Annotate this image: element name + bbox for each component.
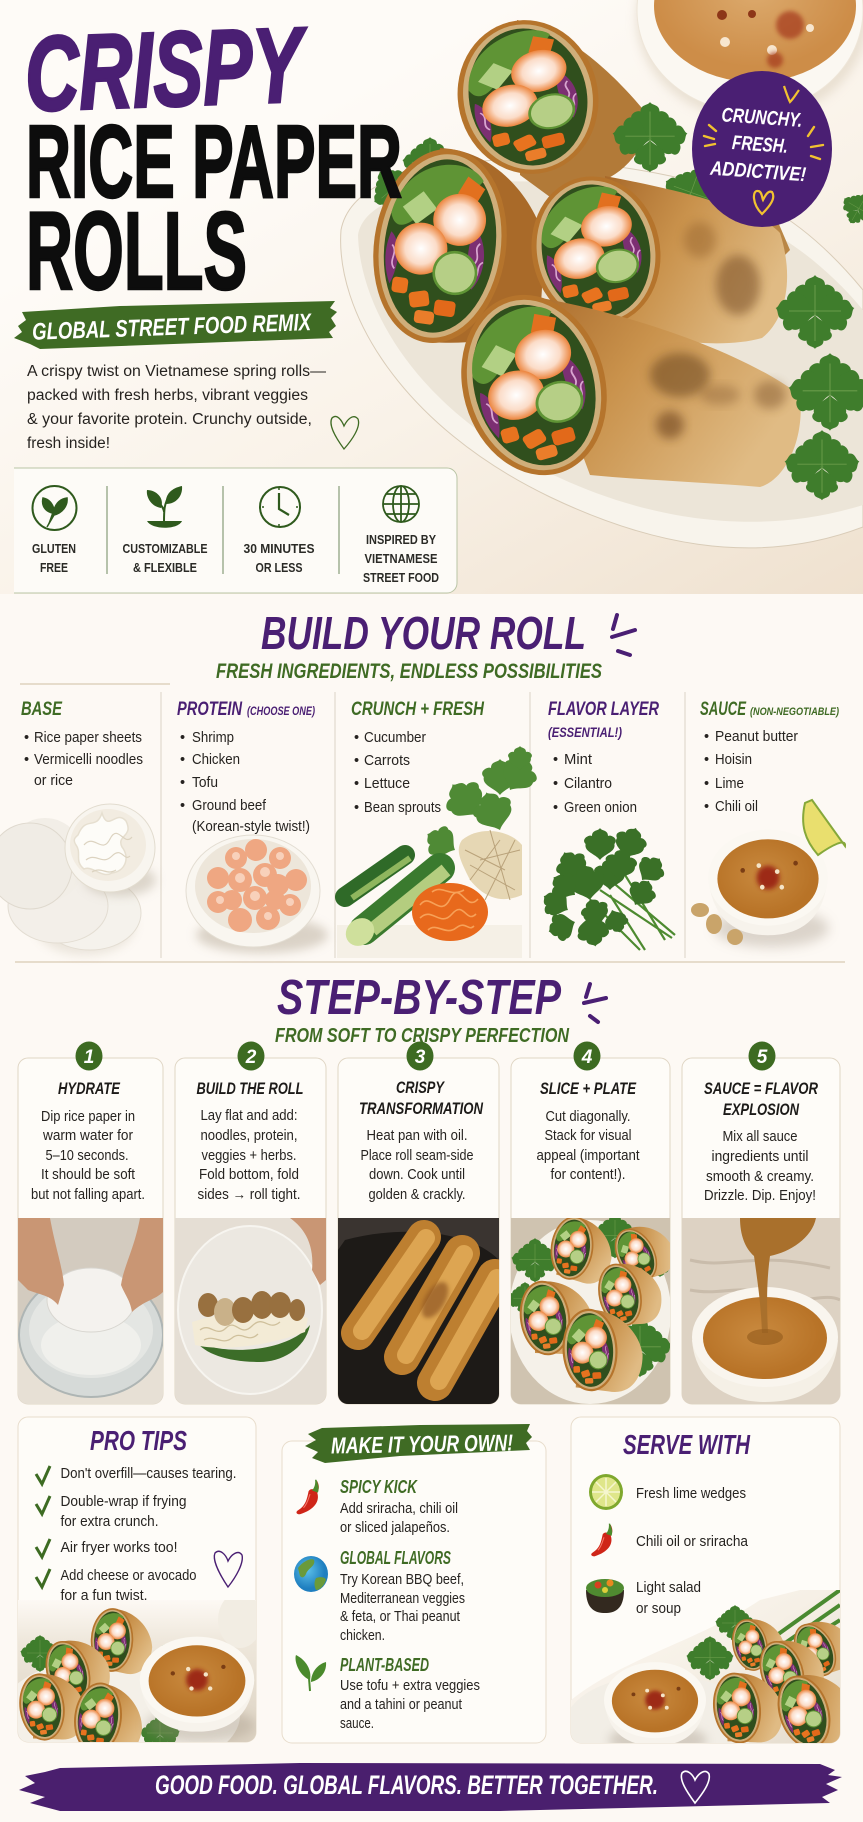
- text: spicy kick: [340, 1477, 458, 1536]
- card: step 1 hydrate: Dip rice paper in: [41, 1109, 135, 1125]
- text: global flavors: & feta, or Thai peanut: [340, 1609, 460, 1625]
- title: crispy rice paper rolls: [23, 6, 402, 313]
- text: plant-based: [340, 1655, 480, 1732]
- column: crunch and fresh: Lettuce: [364, 776, 410, 792]
- column: flavor layer: Cilantro: [564, 776, 612, 792]
- column: crunch and fresh: CRUNCH + FRESH: [351, 699, 485, 720]
- checklist: Don't overfill—causes tearing.: [60, 1466, 236, 1482]
- label: inspired by vietnamese street food: VIETNAMESE: [364, 551, 438, 566]
- intro paragraph: packed with fresh herbs, vibrant veggies: [27, 387, 308, 404]
- card: step 1 hydrate: HYDRATE: [58, 1079, 120, 1098]
- text: global flavors: GLOBAL FLAVORS: [340, 1548, 451, 1568]
- badge: crunchy fresh addictive: CRUNCHY.: [721, 104, 803, 132]
- column: crunch and fresh: •: [354, 800, 359, 816]
- card: step 2 build the roll: [175, 1042, 326, 1404]
- image: plated slices: [511, 1218, 670, 1404]
- column: crunch and fresh: •: [354, 753, 359, 769]
- column: sauce: (NON-NEGOTIABLE): [750, 706, 839, 718]
- column: sauce: Peanut butter: [715, 729, 798, 745]
- label: gluten free: FREE: [40, 560, 68, 575]
- column: protein: [177, 699, 328, 953]
- text: spicy kick: or sliced jalapeños.: [340, 1520, 450, 1536]
- card: step 3 crispy transformation: Place roll seam-side: [360, 1148, 474, 1164]
- intro paragraph: [27, 363, 327, 452]
- card: step 5 sauce: Drizzle. Dip. Enjoy!: [704, 1188, 816, 1204]
- card: step 5 sauce: SAUCE = FLAVOR: [704, 1079, 819, 1098]
- checklist: Double-wrap if frying: [60, 1494, 186, 1510]
- column: base: •: [24, 730, 29, 746]
- icon: chili: [591, 1524, 612, 1556]
- card: step 1 hydrate: warm water for: [42, 1128, 133, 1144]
- number 4: [574, 1042, 600, 1070]
- image: rolls platter: [571, 1590, 840, 1743]
- column: protein: Chicken: [192, 752, 240, 768]
- column: base: [0, 699, 156, 955]
- icon: salad bowl: [586, 1579, 624, 1613]
- card: step 4 slice and plate: appeal (important: [536, 1148, 640, 1164]
- card: step 2 build the roll: veggies + herbs.: [202, 1148, 296, 1164]
- card: step 4 slice and plate: SLICE + PLATE: [540, 1079, 637, 1098]
- label: 30 minutes or less: [244, 541, 315, 575]
- panel: serve with: SERVE WITH: [623, 1429, 751, 1460]
- badge: crunchy fresh addictive: [692, 71, 832, 227]
- text: global flavors: chicken.: [340, 1628, 385, 1644]
- icon: globe: [294, 1556, 328, 1592]
- image: sauce pouring into bowl: [682, 1218, 840, 1404]
- column: protein: (CHOOSE ONE): [247, 704, 315, 718]
- text: light salad or soup: [636, 1580, 701, 1617]
- intro paragraph: A crispy twist on Vietnamese spring rolls—: [27, 363, 327, 380]
- title: crispy rice paper rolls: ROLLS: [26, 190, 247, 313]
- footer banner: [19, 1763, 842, 1811]
- column: sauce: •: [704, 729, 709, 745]
- icon: plant: [296, 1655, 326, 1691]
- card: step 5 sauce: Mix all sauce: [722, 1129, 798, 1145]
- column: flavor layer: FLAVOR LAYER: [548, 699, 659, 720]
- column: base: Rice paper sheets: [34, 730, 142, 746]
- column: sauce: [691, 699, 845, 947]
- text: plant-based: PLANT-BASED: [340, 1655, 429, 1675]
- text: plant-based: sauce.: [340, 1716, 374, 1732]
- column: protein: •: [180, 752, 185, 768]
- text: plant-based: and a tahini or peanut: [340, 1697, 462, 1713]
- checklist: for extra crunch.: [60, 1514, 158, 1530]
- panel: serve with: [570, 1416, 840, 1744]
- card: step 2 build the roll: BUILD THE ROLL: [196, 1079, 304, 1098]
- number 1: [76, 1042, 102, 1070]
- icon: clock: [260, 487, 300, 527]
- column: crunch and fresh: Carrots: [364, 753, 410, 769]
- column: sauce: Lime: [715, 776, 744, 792]
- column: flavor layer: Green onion: [564, 800, 637, 816]
- number 4: 4: [581, 1047, 593, 1068]
- column: crunch and fresh: •: [354, 730, 359, 746]
- text: spicy kick: SPICY KICK: [340, 1477, 418, 1497]
- card: step 1 hydrate: but not falling apart.: [31, 1187, 145, 1203]
- card: step 3 crispy transformation: down. Cook until: [369, 1167, 465, 1183]
- title: crispy rice paper rolls: RICE PAPER: [26, 104, 402, 219]
- text: global flavors: [340, 1548, 465, 1644]
- text: light salad or soup: Light salad: [636, 1580, 701, 1596]
- column: sauce: Chili oil: [715, 799, 758, 815]
- icon: globe: [383, 486, 419, 522]
- column: crunch and fresh: •: [354, 776, 359, 792]
- column: base: •: [24, 752, 29, 768]
- column: protein: (Korean-style twist!): [192, 819, 310, 835]
- card: step 2 build the roll: sides → roll tight.: [198, 1187, 300, 1203]
- card: step 4 slice and plate: Stack for visual: [544, 1128, 632, 1144]
- text: global flavors: Mediterranean veggies: [340, 1591, 465, 1607]
- column: flavor layer: •: [553, 776, 558, 792]
- column: sauce: •: [704, 799, 709, 815]
- heading: step-by-step: STEP-BY-STEP: [277, 971, 561, 1025]
- column: sauce: Hoisin: [715, 752, 752, 768]
- subheading: fresh ingredients: FRESH INGREDIENTS, ENDLESS POSSIBILITIES: [216, 660, 602, 683]
- text: global flavors: Try Korean BBQ beef,: [340, 1572, 464, 1588]
- icon: heart: [681, 1771, 709, 1803]
- panel: pro tips: [18, 1416, 256, 1742]
- image: rice paper and noodles: [0, 804, 156, 955]
- card: step 2 build the roll: Lay flat and add:: [200, 1108, 298, 1124]
- image: rolls frying in pan: [338, 1218, 499, 1404]
- column: flavor layer: •: [553, 800, 558, 816]
- card: step 3 crispy transformation: [338, 1042, 499, 1404]
- column: crunch and fresh: Bean sprouts: [364, 800, 441, 816]
- hero section: [0, 0, 863, 594]
- image: shrimp bowl: [186, 835, 328, 953]
- number 2: [238, 1042, 264, 1070]
- number 3: 3: [415, 1047, 426, 1068]
- column: protein: •: [180, 798, 185, 814]
- column: base: Vermicelli noodles: [34, 752, 143, 768]
- panel: serve with: Fresh lime wedges: [636, 1486, 746, 1502]
- badge: crunchy fresh addictive: FRESH.: [731, 132, 789, 158]
- icon: purple heart doodle: [214, 1551, 242, 1587]
- card: step 4 slice and plate: [506, 1042, 681, 1404]
- icon: green heart doodle: [331, 416, 359, 449]
- card: step 4 slice and plate: for content!).: [550, 1167, 626, 1183]
- number 5: 5: [757, 1047, 768, 1068]
- column: base: BASE: [21, 699, 63, 720]
- column: sauce: •: [704, 752, 709, 768]
- column: base: or rice: [34, 773, 73, 789]
- banner: make it your own: MAKE IT YOUR OWN!: [331, 1429, 513, 1459]
- card: step 4 slice and plate: Cut diagonally.: [546, 1109, 630, 1125]
- text: light salad or soup: or soup: [636, 1601, 681, 1617]
- label: gluten free: GLUTEN: [32, 541, 76, 556]
- banner: global street food remix: [14, 301, 337, 349]
- card: step 5 sauce: [682, 1042, 840, 1404]
- column: protein: Tofu: [192, 775, 218, 791]
- banner: global street food remix: GLOBAL STREET FOOD REMIX: [32, 309, 313, 346]
- card: step 5 sauce: ingredients until: [712, 1149, 808, 1165]
- number 3: [406, 1042, 434, 1070]
- column: flavor layer: •: [553, 752, 558, 768]
- image: herbs: [537, 822, 675, 950]
- card: step 5 sauce: smooth & creamy.: [706, 1169, 814, 1185]
- column: protein: •: [180, 730, 185, 746]
- title: crispy rice paper rolls: CRISPY: [23, 6, 310, 134]
- icon: leaf in circle: [32, 486, 76, 530]
- label: inspired by vietnamese street food: STREET FOOD: [363, 570, 439, 585]
- column: protein: PROTEIN: [177, 699, 243, 720]
- label: customizable and flexible: CUSTOMIZABLE: [122, 541, 208, 556]
- heading: build your roll: BUILD YOUR ROLL: [261, 607, 586, 659]
- label: customizable and flexible: [122, 541, 208, 575]
- card: step 3 crispy transformation: Heat pan with oil.: [366, 1128, 468, 1144]
- panel: pro tips: PRO TIPS: [90, 1425, 187, 1456]
- label: customizable and flexible: & FLEXIBLE: [133, 560, 197, 575]
- image: hydrating rice paper: [18, 1218, 163, 1404]
- panel: make it your own: [282, 1424, 546, 1743]
- label: gluten free: [32, 541, 76, 575]
- column: protein: Ground beef: [192, 798, 267, 814]
- photo: plate of crispy rolls: [341, 5, 863, 548]
- subheading: from soft to crispy: FROM SOFT TO CRISPY PERFECTION: [275, 1025, 569, 1047]
- number 5: [748, 1042, 776, 1070]
- label: inspired by vietnamese street food: [363, 532, 439, 585]
- column: sauce: SAUCE: [700, 699, 747, 720]
- label: 30 minutes or less: OR LESS: [256, 560, 303, 575]
- card: step 1 hydrate: It should be soft: [41, 1167, 135, 1183]
- card: step 3 crispy transformation: golden & crackly.: [368, 1187, 466, 1203]
- intro paragraph: fresh inside!: [27, 435, 110, 452]
- image: peanut sauce with lime: [691, 800, 845, 947]
- card: step 1 hydrate: [18, 1042, 163, 1404]
- checklist: [36, 1466, 236, 1604]
- column: protein: •: [180, 775, 185, 791]
- column: sauce: •: [704, 776, 709, 792]
- checklist: Add cheese or avocado: [60, 1568, 196, 1584]
- image: rolls with dipping sauce: [18, 1600, 256, 1742]
- card: step 1 hydrate: 5–10 seconds.: [46, 1148, 128, 1164]
- icon: sprout: [147, 486, 182, 528]
- icon: chili: [296, 1480, 319, 1514]
- column: crunch and fresh: [337, 699, 543, 958]
- banner: make it your own: [305, 1424, 532, 1463]
- column: flavor layer: (ESSENTIAL!): [548, 724, 622, 740]
- column: protein: Shrimp: [192, 730, 234, 746]
- intro paragraph: & your favorite protein. Crunchy outside,: [27, 411, 312, 428]
- checklist: Air fryer works too!: [60, 1540, 178, 1556]
- photo: peanut sauce bowl: [636, 0, 863, 120]
- text: plant-based: Use tofu + extra veggies: [340, 1678, 480, 1694]
- column: crunch and fresh: Cucumber: [364, 730, 426, 746]
- column: flavor layer: [537, 699, 675, 950]
- image: vegetables: [337, 746, 543, 958]
- text: spicy kick: Add sriracha, chili oil: [340, 1501, 458, 1517]
- card: step 3 crispy transformation: TRANSFORMATION: [359, 1099, 484, 1118]
- card: step 5 sauce: EXPLOSION: [723, 1100, 800, 1119]
- footer banner: GOOD FOOD. GLOBAL FLAVORS. BETTER TOGETHER.: [155, 1770, 658, 1800]
- card: step 2 build the roll: noodles, protein,: [200, 1128, 298, 1144]
- panel: serve with: Chili oil or sriracha: [636, 1534, 749, 1550]
- panel: feature badges: [14, 468, 457, 593]
- number 2: 2: [245, 1047, 257, 1068]
- label: inspired by vietnamese street food: INSPIRED BY: [366, 532, 436, 547]
- number 1: 1: [84, 1047, 94, 1068]
- icon: lime: [589, 1474, 623, 1510]
- badge: crunchy fresh addictive: ADDICTIVE!: [709, 158, 807, 186]
- checklist: for a fun twist.: [60, 1588, 148, 1604]
- column: flavor layer: Mint: [564, 752, 592, 768]
- label: 30 minutes or less: 30 MINUTES: [244, 541, 315, 556]
- image: assembling roll: [175, 1218, 326, 1404]
- card: step 2 build the roll: Fold bottom, fold: [199, 1167, 299, 1183]
- card: step 3 crispy transformation: CRISPY: [396, 1078, 445, 1097]
